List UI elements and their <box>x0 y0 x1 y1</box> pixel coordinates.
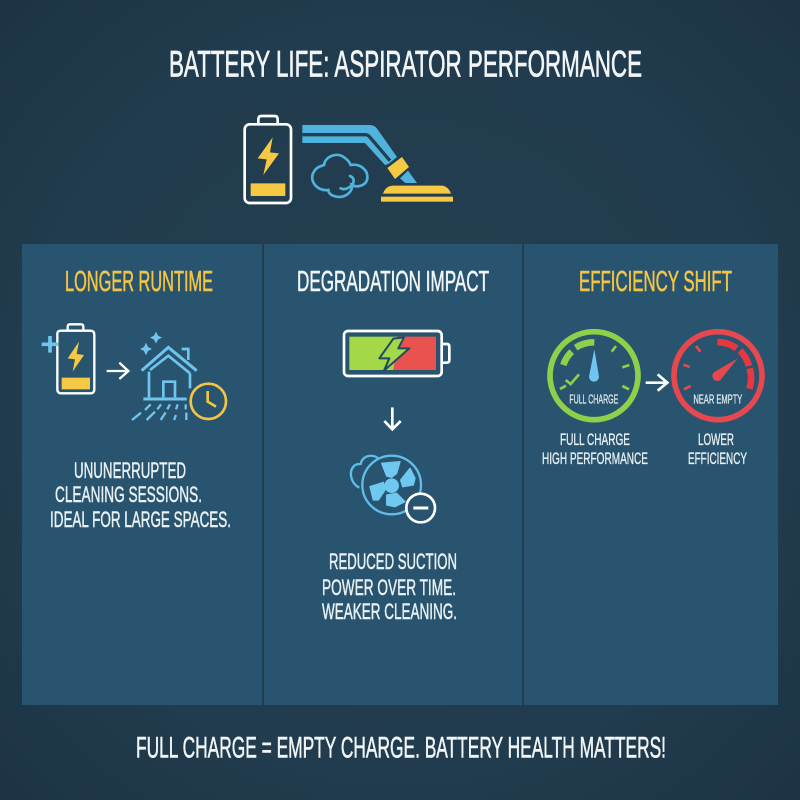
icon: full charge gauge <box>550 332 638 420</box>
panel: efficiency shift <box>524 244 778 705</box>
text: degradation body <box>322 549 457 624</box>
icon: degrading battery, arrow and fan <box>344 331 449 522</box>
panel: degradation impact <box>264 244 522 705</box>
text: longer runtime body: IDEAL FOR LARGE SPACES. <box>50 507 231 532</box>
text: full charge caption: HIGH PERFORMANCE <box>542 449 648 468</box>
text: lower efficiency caption <box>688 430 747 468</box>
icon: battery and vacuum hero <box>245 116 453 203</box>
text: longer runtime body: UNUNERRUPTED <box>74 458 186 483</box>
chart: gauges <box>550 332 762 420</box>
icon: full charge gauge: FULL CHARGE <box>569 391 618 406</box>
icon: dust cloud <box>312 155 367 197</box>
arrow <box>107 363 128 379</box>
icon: near empty gauge: NEAR EMPTY <box>693 391 742 406</box>
icon: house <box>132 332 197 420</box>
text: degradation body: WEAKER CLEANING. <box>322 599 457 624</box>
text: full charge caption: FULL CHARGE <box>560 430 630 449</box>
icon: battery with plus <box>42 324 94 393</box>
heading: longer runtime: LONGER RUNTIME <box>65 266 213 298</box>
arrow <box>384 407 401 429</box>
text: lower efficiency caption: LOWER <box>698 430 734 449</box>
icon: split charge battery <box>344 331 449 376</box>
icon: clock <box>191 384 226 419</box>
arrow <box>646 374 667 391</box>
text: degradation body: REDUCED SUCTION <box>329 549 457 574</box>
text: full charge caption <box>542 430 648 468</box>
text: longer runtime body: CLEANING SESSIONS. <box>55 482 202 507</box>
icon: battery to house cleaning <box>42 324 226 420</box>
icon: hero battery <box>245 116 291 203</box>
text: degradation body: POWER OVER TIME. <box>322 575 456 600</box>
icon: vacuum hose and nozzle <box>302 125 453 202</box>
text: lower efficiency caption: EFFICIENCY <box>688 449 747 468</box>
text: longer runtime body <box>50 458 231 532</box>
icon: weak fan <box>351 456 435 522</box>
panel: longer runtime <box>22 244 262 705</box>
heading: degradation impact: DEGRADATION IMPACT <box>297 266 489 298</box>
icon: near empty gauge <box>674 332 762 420</box>
